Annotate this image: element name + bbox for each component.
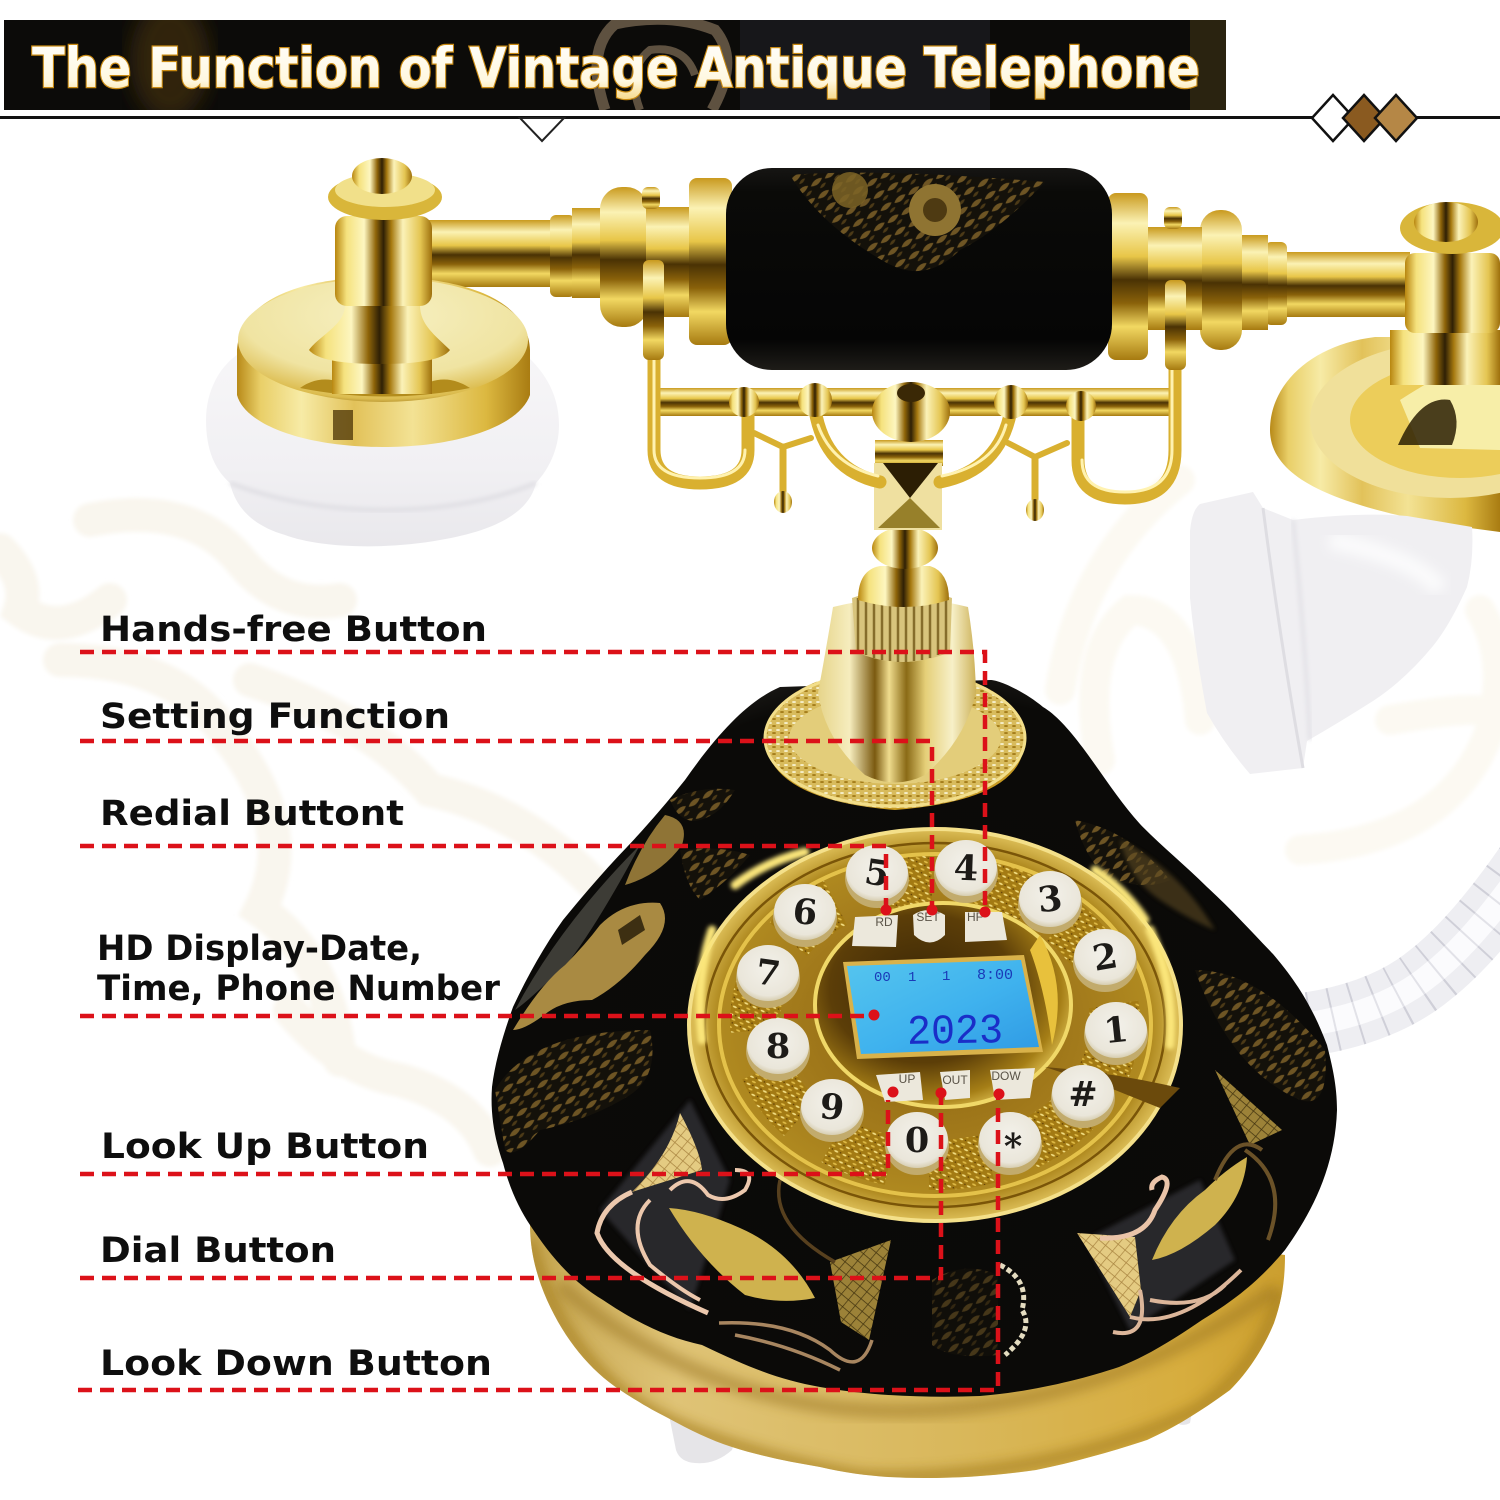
neck bell [818, 598, 976, 782]
function buttons: OUT [942, 1073, 968, 1087]
label: look down button [78, 1088, 1004, 1390]
stem ball [872, 382, 950, 442]
center flower [932, 1265, 1026, 1356]
right earpiece hook [1270, 202, 1500, 532]
label: redial button: Redial Buttont [100, 794, 404, 834]
diamond markers [1312, 95, 1417, 141]
LCD display: 1 [908, 970, 916, 986]
rim highlights [700, 852, 1171, 1045]
white mouthpiece [1190, 492, 1472, 774]
inner well [815, 903, 1071, 1107]
function buttons: RD [875, 915, 893, 929]
coiled cord [1310, 860, 1500, 1024]
label: hd display: Time, Phone Number [97, 969, 501, 1009]
cradle finials [729, 383, 1096, 521]
number keys: 0 [905, 1120, 929, 1161]
telephone gold base [530, 1225, 1285, 1478]
handset right arm [1285, 252, 1410, 317]
label: setting function: Setting Function [100, 697, 450, 737]
function buttons: DOW [991, 1069, 1021, 1083]
number keys [736, 840, 1148, 1175]
label: hands-free button [80, 610, 990, 918]
function buttons: UP [899, 1072, 915, 1086]
number keys: 1 [1102, 1009, 1130, 1052]
LCD display [843, 955, 1043, 1059]
label: redial button [80, 794, 892, 916]
handset right turned collar [1108, 193, 1287, 370]
number keys: 9 [818, 1086, 846, 1129]
telephone black body [492, 680, 1337, 1397]
header banner [4, 20, 1226, 110]
number keys: 7 [753, 951, 783, 995]
faint ornament: right [1060, 480, 1500, 850]
glossy reflections [600, 1100, 1235, 1330]
label: look up button: Look Up Button [101, 1127, 429, 1167]
label: look up button [80, 1086, 898, 1174]
header rule [0, 116, 1500, 119]
triangle marker [520, 118, 564, 141]
function buttons: HF [967, 910, 983, 924]
title: The Function of Vintage Antique Telephone [32, 36, 1200, 100]
handset porcelain grip [726, 168, 1112, 370]
faint ornament: left [0, 515, 590, 1150]
number keys: 5 [862, 851, 892, 895]
handset left turned collar [550, 178, 732, 360]
label: setting function [80, 697, 938, 916]
function buttons [852, 910, 1035, 1102]
number keys: # [1068, 1074, 1098, 1115]
number keys: 4 [953, 848, 979, 889]
label: look down button: Look Down Button [100, 1344, 492, 1384]
gilded scrolls right [1077, 1070, 1282, 1333]
number keys: 3 [1036, 878, 1064, 921]
LCD display: 1 [942, 969, 950, 985]
number keys: 6 [791, 891, 819, 934]
rotary dial plate [689, 829, 1181, 1221]
floral decoration [495, 789, 1326, 1152]
LCD display: 8:00 [977, 967, 1013, 984]
function buttons: SET [916, 910, 940, 924]
number keys: 8 [766, 1026, 790, 1067]
gilded scrolls left [597, 1113, 891, 1370]
label: hd display [80, 929, 880, 1020]
number keys: * [1004, 1126, 1022, 1167]
telephone feet [668, 1395, 1195, 1463]
left earpiece [206, 158, 559, 546]
telephone stem [858, 440, 949, 607]
label: hands-free button: Hands-free Button [100, 610, 487, 650]
label: dial button: Dial Button [100, 1231, 336, 1271]
number keys: 2 [1090, 935, 1121, 980]
knurled collar [852, 589, 952, 662]
label: dial button [80, 1088, 946, 1278]
LCD display: 2023 [907, 1007, 1003, 1057]
embossed floral ring [755, 879, 1115, 1165]
handset left arm [425, 220, 555, 287]
wire cradle [650, 270, 1180, 508]
neck base flange [765, 670, 1025, 810]
label: hd display: HD Display-Date, [97, 929, 422, 969]
LCD display: 00 [874, 970, 891, 986]
